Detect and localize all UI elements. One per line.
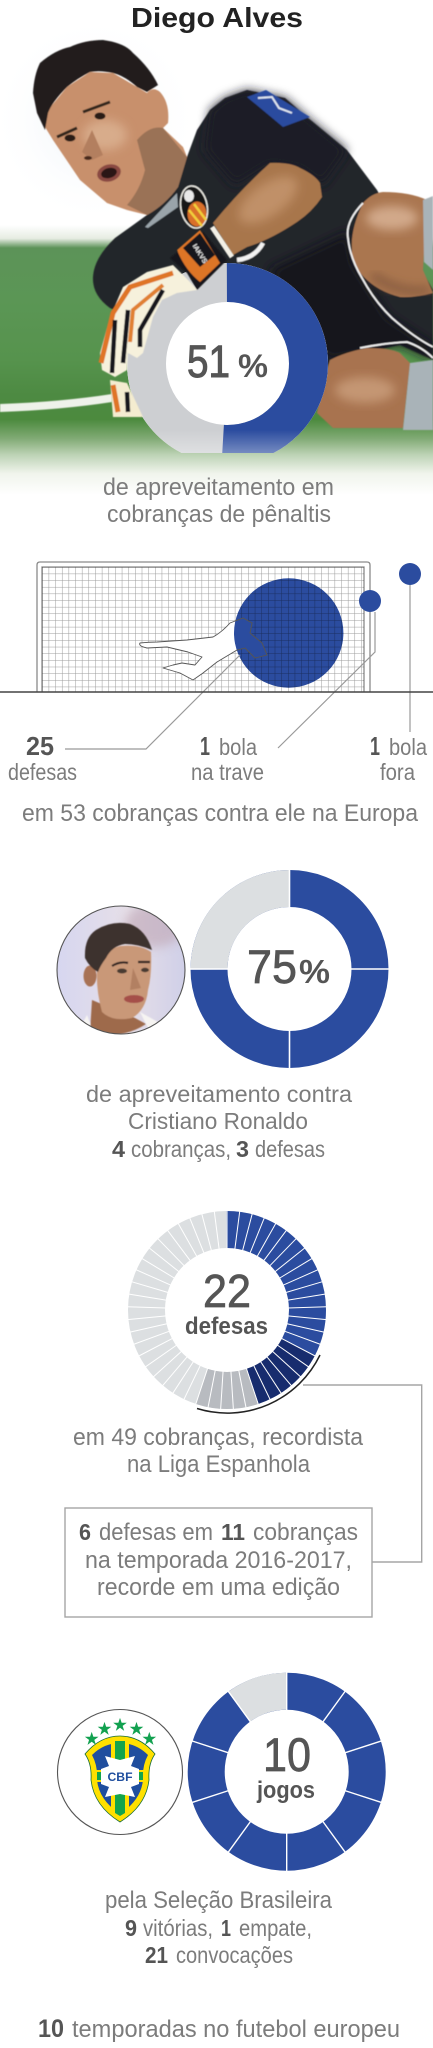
caption: contra Cristiano Ronaldo xyxy=(86,1081,352,1162)
label: 25 defesas: defesas xyxy=(8,759,77,785)
ground line xyxy=(0,691,433,693)
glove xyxy=(100,227,232,417)
caption: aproveitamento: de apreveitamento em xyxy=(103,474,334,501)
caption: contra Cristiano Ronaldo: 3 xyxy=(236,1136,249,1162)
label: 1 bola na trave: 1 xyxy=(200,731,210,761)
caption: aproveitamento xyxy=(103,474,334,528)
blue circle: 25 defesas xyxy=(234,578,343,688)
donut chart: 22 defesas xyxy=(127,1210,327,1410)
leader lines xyxy=(65,585,410,749)
label: 25 defesas xyxy=(8,731,77,785)
jersey and shorts xyxy=(93,90,433,400)
goal diagram xyxy=(0,562,433,749)
collar and badge xyxy=(145,193,178,228)
donut chart: 75%: % xyxy=(299,953,330,990)
shorts trim xyxy=(348,203,433,347)
caption: Seleção Brasileira: 21 xyxy=(145,1942,168,1968)
label: 1 bola na trave xyxy=(191,731,264,785)
donut chart: 10 jogos: jogos xyxy=(256,1777,315,1804)
caption: contra Cristiano Ronaldo: defesas xyxy=(255,1136,325,1162)
caption: 53 cobranças: em 53 cobranças contra ele na Europa xyxy=(22,800,419,827)
ball on the post xyxy=(359,590,381,612)
goalkeeper silhouette xyxy=(140,618,267,680)
callout box: recorde: defesas em xyxy=(99,1519,213,1546)
donut value: 51% xyxy=(187,336,268,387)
caption: contra Cristiano Ronaldo: de apreveitamento contra xyxy=(86,1081,352,1107)
arc and connector to record box xyxy=(197,1355,422,1562)
shield xyxy=(85,1736,155,1822)
crest: CBF xyxy=(58,1710,182,1834)
label: 1 bola fora: fora xyxy=(380,759,415,785)
callout box: recorde: cobranças xyxy=(253,1519,358,1546)
crest: CBF: CBF xyxy=(108,1770,132,1784)
donut chart: 75%: 75 xyxy=(247,940,297,993)
title: Diego Alves xyxy=(131,2,303,33)
donut value: 51%: % xyxy=(238,348,268,384)
caption: 49 cobranças xyxy=(73,1424,364,1478)
caption: 10 temporadas: temporadas no futebol europeu xyxy=(72,2016,400,2043)
donut chart: 10 jogos: 10 xyxy=(263,1728,311,1781)
donut chart: 22 defesas: 22 xyxy=(203,1265,251,1317)
upper thigh and knee xyxy=(352,192,433,297)
label: 25 defesas: 25 xyxy=(26,731,54,761)
donut value: 51%: 51 xyxy=(187,336,230,387)
caption: 49 cobranças: em 49 cobranças, recordista xyxy=(73,1424,364,1451)
lower thigh xyxy=(317,348,410,428)
ball outside xyxy=(399,563,421,585)
donut chart: 10 jogos xyxy=(191,1671,383,1873)
label: 1 bola fora xyxy=(370,731,427,785)
caption: 49 cobranças: na Liga Espanhola xyxy=(127,1451,311,1478)
caption: Seleção Brasileira: 9 xyxy=(125,1915,137,1941)
goal frame xyxy=(37,562,370,692)
hero photo: goalkeeper on the field xyxy=(0,15,433,495)
caption: Seleção Brasileira: vitórias, xyxy=(143,1915,213,1941)
stars xyxy=(85,1718,156,1745)
photo: Cristiano Ronaldo xyxy=(55,903,187,1036)
caption: aproveitamento: cobranças de pênaltis xyxy=(107,501,331,528)
label: 1 bola na trave: na trave xyxy=(191,759,264,785)
glove: IAKVS xyxy=(191,243,208,265)
caption: Seleção Brasileira xyxy=(105,1887,333,1968)
caption: contra Cristiano Ronaldo: Cristiano Ronaldo xyxy=(128,1108,308,1134)
donut chart: 51% xyxy=(127,263,328,464)
caption: Seleção Brasileira: pela Seleção Brasileira xyxy=(105,1887,333,1914)
caption: 10 temporadas: 10 xyxy=(38,2015,64,2043)
label: 1 bola fora: bola xyxy=(389,734,427,760)
caption: contra Cristiano Ronaldo: cobranças, xyxy=(131,1136,231,1162)
donut chart: 22 defesas: defesas xyxy=(185,1313,268,1340)
head and neck xyxy=(45,72,187,215)
callout box: recorde: 11 xyxy=(221,1519,245,1545)
callout box: recorde: 6 xyxy=(79,1519,91,1545)
label: 1 bola na trave: bola xyxy=(219,734,257,760)
caption: Seleção Brasileira: convocações xyxy=(176,1942,293,1968)
callout box: recorde: recorde em uma edição xyxy=(97,1574,340,1601)
donut chart: 75% xyxy=(188,868,391,1070)
label: 1 bola fora: 1 xyxy=(370,731,380,761)
caption: contra Cristiano Ronaldo: 4 xyxy=(112,1136,125,1162)
callout box: recorde xyxy=(65,1508,372,1617)
forearm xyxy=(213,163,322,255)
callout box: recorde: na temporada 2016-2017, xyxy=(85,1547,352,1574)
goal net xyxy=(42,567,364,692)
caption: Seleção Brasileira: empate, xyxy=(239,1915,312,1941)
caption: Seleção Brasileira: 1 xyxy=(221,1915,231,1941)
